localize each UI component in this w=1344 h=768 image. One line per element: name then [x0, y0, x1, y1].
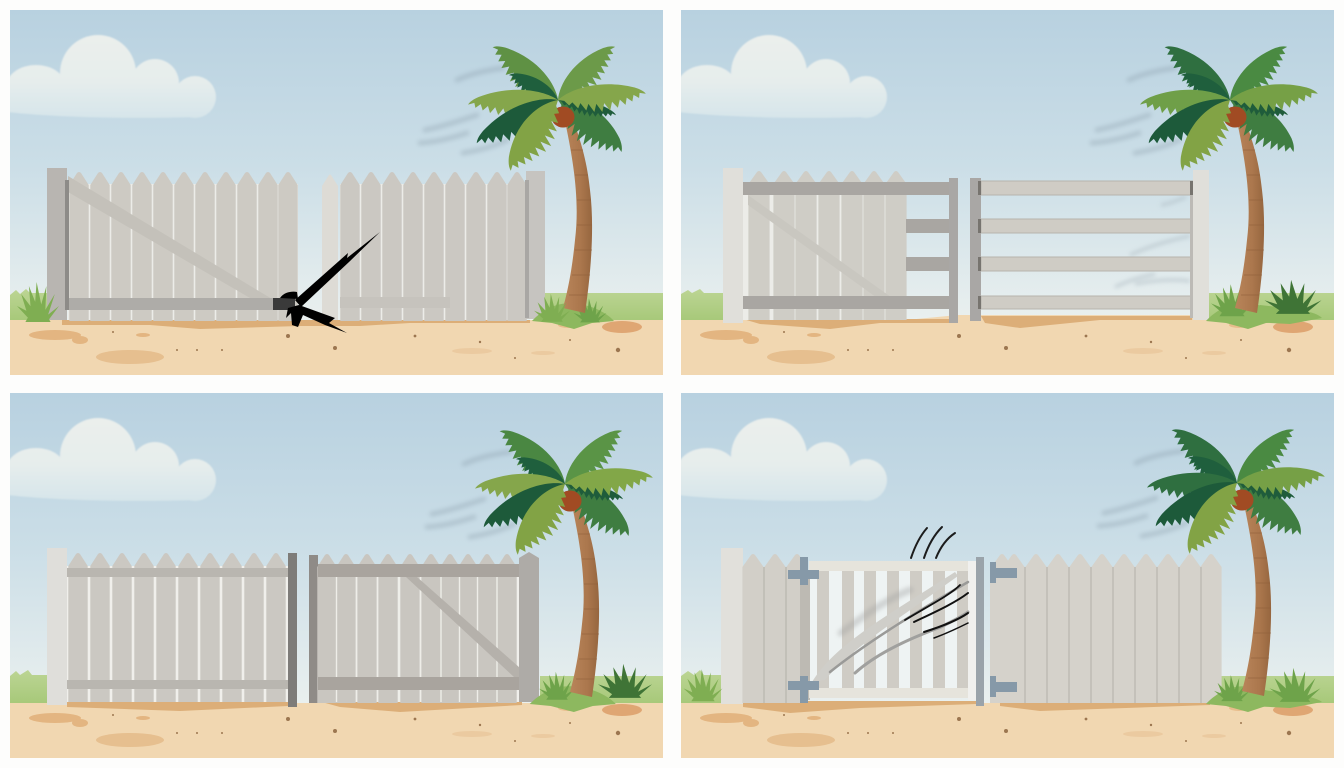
strip on right post — [1190, 195, 1193, 318]
gate latch stile — [968, 561, 976, 700]
palm tree and wind — [1092, 36, 1319, 313]
faint diagonal brace — [748, 195, 886, 296]
right post — [1193, 170, 1209, 320]
sky — [10, 393, 663, 705]
pickets — [748, 171, 907, 320]
gate hinges — [788, 557, 819, 703]
left leaf end post — [288, 553, 297, 707]
sky — [681, 393, 1334, 705]
right gate leaf pickets — [340, 172, 527, 321]
diagonal brace — [406, 577, 520, 677]
middle-left upright — [949, 178, 958, 323]
grass band — [681, 289, 1334, 322]
sand patches — [29, 321, 642, 364]
sand ground — [681, 703, 1334, 758]
cloud — [6, 35, 216, 118]
panel: top left, broken gate — [6, 10, 663, 375]
fence gap backing — [67, 566, 519, 702]
ground shadow — [743, 316, 1192, 329]
metal post — [976, 557, 984, 706]
broken latch black crack — [273, 232, 380, 333]
ground shadow — [62, 320, 530, 329]
sand ground — [681, 315, 1334, 375]
right leaf pickets — [317, 554, 517, 703]
palm tree and wind — [427, 420, 654, 697]
dark rails — [743, 182, 950, 309]
base grass — [534, 294, 570, 322]
hinge strip — [65, 180, 69, 310]
gate rails — [809, 561, 969, 698]
palm tree and wind — [1099, 419, 1326, 696]
left post — [723, 168, 743, 323]
right leaf rails — [318, 564, 524, 690]
fence gap backing — [743, 195, 886, 320]
grass band — [681, 670, 1334, 705]
left post — [721, 548, 743, 704]
plants — [1206, 280, 1322, 329]
cloud — [6, 418, 216, 501]
panel: bottom right, slatted gate with hinges — [677, 393, 1334, 758]
right post — [526, 171, 545, 319]
light rails — [981, 181, 1193, 309]
fence gap backing — [69, 184, 508, 292]
right leaf post — [309, 555, 318, 703]
right post hinges — [990, 562, 1017, 697]
sand patches — [700, 704, 1313, 747]
wind streaks behind rails — [1115, 197, 1190, 287]
plants — [684, 668, 1322, 712]
sky — [681, 10, 1334, 322]
left leaf pickets — [68, 553, 286, 702]
picket seams — [336, 566, 497, 702]
sky — [10, 10, 663, 322]
cloud — [677, 35, 887, 118]
left gate leaf pickets — [69, 172, 298, 321]
palm tree and wind — [420, 36, 647, 313]
left post — [47, 168, 67, 320]
panel: top right, open rail frame — [677, 10, 1334, 375]
right pickets — [990, 554, 1222, 703]
gate hinge stile — [800, 570, 810, 700]
sand patches — [700, 321, 1313, 364]
bottom rail — [66, 298, 274, 310]
loose picket — [322, 174, 338, 320]
faint right rail — [340, 297, 450, 308]
plants — [530, 664, 652, 712]
left pickets — [742, 554, 808, 703]
panel: bottom left, closed gate — [6, 393, 663, 758]
right post — [519, 552, 539, 702]
ground shadow — [743, 701, 1210, 713]
strip on right post — [525, 180, 529, 318]
rail brackets — [978, 181, 1193, 309]
left leaf rails — [67, 568, 288, 689]
grass band — [10, 289, 663, 322]
cloud — [677, 418, 887, 501]
gate slats — [817, 571, 968, 688]
sand ground — [10, 703, 663, 758]
sand patches — [29, 704, 642, 747]
ground shadow — [67, 701, 522, 712]
plants — [17, 282, 614, 329]
wind streaks across gate — [812, 572, 968, 682]
diagonal brace — [68, 176, 270, 298]
left post — [47, 548, 67, 705]
picket seams — [764, 567, 1201, 703]
sand ground — [10, 320, 663, 375]
gate opening light background — [810, 571, 968, 688]
grass band — [10, 670, 663, 705]
middle-right upright — [970, 178, 981, 321]
wind marks above gate — [911, 527, 955, 558]
